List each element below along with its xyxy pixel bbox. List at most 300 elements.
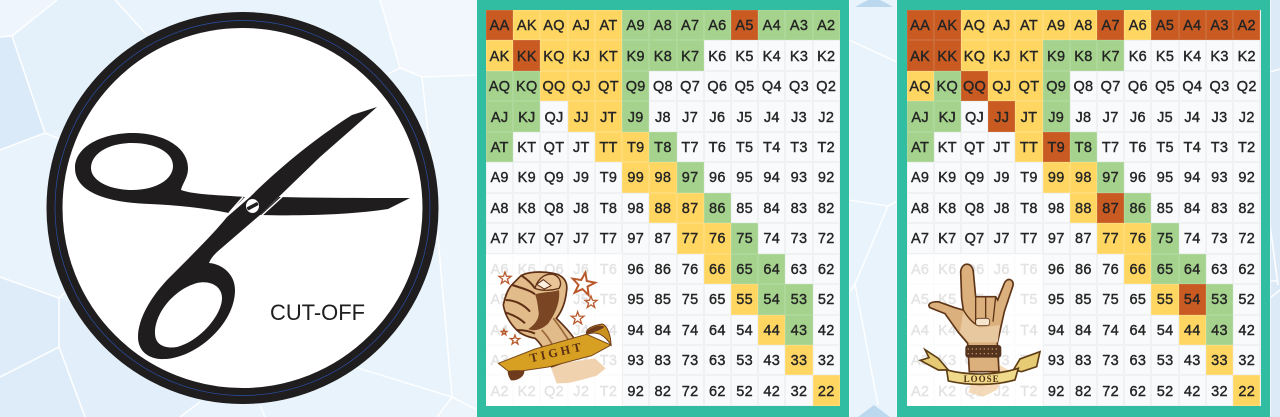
row J [907,101,1259,132]
row Q: QJ [992,79,1011,95]
row 5 [486,284,839,315]
row 6: 66 [1129,262,1146,278]
row 8 [487,193,839,223]
row 8: 82 [1238,201,1255,217]
row 3: Q3 [965,353,985,369]
row 3: 43 [1184,353,1201,369]
row 2 [486,375,840,406]
row A: A4 [763,18,781,34]
row 9: K9 [938,170,956,186]
row A [486,10,840,40]
row J: QJ [965,110,984,126]
row 3: 63 [709,353,726,369]
row Q: QT [1019,79,1039,95]
row 5: 55 [1157,292,1173,308]
row Q: Q9 [1046,79,1066,95]
row J: KJ [518,110,536,126]
row A: AJ [993,18,1011,34]
row J: J3 [791,110,807,126]
row 8: K8 [938,201,956,217]
row 4: K4 [518,323,536,339]
row 2: 22 [818,384,835,400]
row T: T9 [1047,140,1065,156]
row A: A6 [708,18,727,34]
row 7: 72 [1238,231,1255,247]
row J: J8 [655,110,671,126]
icon: scissors [75,107,410,359]
row 4: Q4 [965,323,985,339]
row 7: 77 [1102,231,1119,247]
row 4: 44 [1184,323,1201,339]
banner text: LOOSE [964,374,1000,384]
row 5: Q5 [544,292,564,308]
row 8: 83 [791,201,807,217]
row K: K6 [708,49,727,65]
row 5: 85 [655,292,671,308]
row J [486,101,839,132]
row 9: Q9 [544,170,564,186]
row 9: 93 [791,170,807,186]
row 7: K7 [518,231,536,247]
row J: KJ [939,110,956,126]
row 5: 53 [791,292,807,308]
row J: J3 [1212,110,1227,126]
hand shading [960,312,1000,342]
row 2: A2 [490,384,509,400]
row 6: 96 [1048,262,1065,278]
row T: T5 [1156,140,1174,156]
row 3: A3 [911,353,929,369]
row 2: 32 [791,384,807,400]
row 6: 64 [1184,262,1201,278]
row 6: 86 [1075,262,1092,278]
bracelet [965,345,1001,358]
row A: AJ [572,18,590,34]
hand [929,264,1013,372]
row 4: A4 [490,323,509,339]
row 8: 87 [1102,201,1119,217]
row 5: J5 [573,292,589,308]
row 2: J2 [573,384,589,400]
row A: A8 [654,18,672,34]
row 2: 52 [736,384,753,400]
row 4: 64 [709,323,726,339]
row Q: Q5 [1155,79,1175,95]
row K [486,40,839,71]
row 4: 43 [791,323,807,339]
row A: A2 [1238,18,1256,34]
row 5: 53 [1211,292,1228,308]
row 5: A5 [490,292,509,308]
row T: T6 [709,140,726,156]
row 3: 53 [1157,353,1173,369]
row K: KK [937,49,957,65]
row 5: T5 [1020,292,1038,308]
row 7: Q7 [544,231,564,247]
row A: A8 [1074,18,1093,34]
row 6 [486,254,839,284]
row 3: 33 [1211,353,1228,369]
row K: KK [517,49,537,65]
wrist splash [550,358,606,383]
row 5: J5 [994,292,1010,308]
row 8: 88 [1075,201,1092,217]
row T: JT [573,140,590,156]
row 2: Q2 [965,384,985,400]
row 7 [908,223,1259,254]
row 4: 54 [1157,323,1173,339]
row 4: 84 [1075,323,1092,339]
row 5: K5 [518,292,536,308]
row 8: T8 [1020,201,1038,217]
row 3 [486,345,839,375]
row 7: A7 [490,231,509,247]
row T: T5 [736,140,753,156]
row A: A9 [627,18,645,34]
row 2: 62 [709,384,726,400]
row T: T4 [763,140,781,156]
row 3: 93 [627,353,644,369]
fist shading [528,290,559,330]
row 9: 96 [709,170,726,186]
row 3: T3 [600,353,617,369]
row K: K6 [1129,49,1147,65]
row A: AQ [543,18,565,34]
row 4: Q4 [544,323,564,339]
row T: KT [938,140,957,156]
row 2: 42 [763,384,780,400]
row A: AK [937,18,957,34]
row T: T3 [1211,140,1228,156]
row 6: 63 [791,262,807,278]
row 4 [486,315,839,345]
row J: J5 [737,110,753,126]
row Q: AQ [909,79,931,95]
row 8: 86 [1129,201,1146,217]
badge circle [54,20,430,396]
banner tails [920,350,1040,372]
row 5: 55 [736,292,753,308]
row Q: Q3 [789,79,809,95]
row 4: 84 [655,323,671,339]
row 8: 85 [736,201,753,217]
row 7: 87 [655,231,671,247]
row 7: 76 [1129,231,1146,247]
row 8: Q8 [544,201,564,217]
row J: J6 [709,110,725,126]
row 8: 88 [655,201,671,217]
row 9: J9 [994,170,1010,186]
row 2: A2 [911,384,929,400]
row 9: 99 [1048,170,1065,186]
row J: J5 [1157,110,1173,126]
row 8: 82 [818,201,835,217]
row K: K9 [1047,49,1065,65]
row K: KQ [543,49,565,65]
splash [968,365,1008,397]
row 5: T5 [600,292,617,308]
row T: T8 [654,140,672,156]
row 8: J8 [994,201,1010,217]
row 6: 65 [1157,262,1173,278]
row K: K7 [681,49,699,65]
row 8: Q8 [965,201,985,217]
row 2: K2 [518,384,536,400]
row Q: AQ [489,79,510,95]
row 5: 52 [818,292,835,308]
row 9: 97 [1102,170,1119,186]
row 2: 92 [627,384,644,400]
row 7: 73 [1211,231,1228,247]
row 4: A4 [911,323,929,339]
row 6: 96 [627,262,644,278]
row J: J4 [764,110,780,126]
row 3: J3 [994,353,1010,369]
row 5: Q5 [965,292,985,308]
row T: T2 [1238,140,1256,156]
row 4: 44 [763,323,780,339]
row Q: KQ [937,79,958,95]
row 9 [487,162,839,193]
row K: K3 [790,49,808,65]
row K: KJ [993,49,1011,65]
row 8: J8 [573,201,589,217]
row J: J4 [1184,110,1200,126]
row T: T3 [790,140,808,156]
row 7: 75 [1157,231,1173,247]
row 6: 62 [1238,262,1255,278]
row 7: 74 [763,231,780,247]
row 5: 65 [709,292,726,308]
row 9: Q9 [965,170,985,186]
row K: K4 [1183,49,1201,65]
row T: AT [911,140,929,156]
row K: K8 [1074,49,1093,65]
row 3: T3 [1020,353,1038,369]
row T [486,132,839,162]
icon: rock-on hand with LOOSE banner [920,264,1040,397]
row 6: 62 [818,262,835,278]
row 4: 74 [682,323,698,339]
row 7: 97 [627,231,644,247]
row 8: 86 [709,201,726,217]
row J: J7 [1103,110,1119,126]
row 6: K6 [518,262,536,278]
row 9: T9 [600,170,617,186]
row 3: 93 [1048,353,1065,369]
row J: JT [1021,110,1037,126]
row A: A6 [1129,18,1147,34]
row J: J9 [1048,110,1064,126]
row 6: A6 [911,262,929,278]
row 6: 76 [682,262,698,278]
row 4: 54 [736,323,753,339]
row 6: 64 [763,262,780,278]
chart: tight range grid [486,10,840,406]
row Q: QT [598,79,619,95]
row T: T8 [1075,140,1092,156]
row 5: 75 [682,292,698,308]
row K: K5 [735,49,754,65]
row 6: Q6 [965,262,985,278]
row A: A9 [1047,18,1065,34]
row K: K9 [627,49,645,65]
row T: T7 [1102,140,1119,156]
row 5: A5 [911,292,929,308]
row A: AT [599,18,618,34]
row 3: 32 [818,353,835,369]
row J: J2 [1239,110,1255,126]
row T: T9 [627,140,644,156]
row J: J7 [682,110,698,126]
row 9: 95 [736,170,753,186]
row A: A7 [1101,18,1120,34]
row 6: 76 [1102,262,1119,278]
row 2: J2 [994,384,1010,400]
row 2 [907,375,1260,406]
row K: AK [490,49,510,65]
row T [907,132,1259,162]
row Q: Q2 [816,79,836,95]
row 3: 83 [655,353,671,369]
row 8: A8 [490,201,509,217]
row 3: Q3 [544,353,564,369]
row Q: QJ [572,79,591,95]
row Q: Q3 [1210,79,1229,95]
row 8: 87 [682,201,698,217]
row 8: 84 [763,201,780,217]
row 3: A3 [490,353,509,369]
row 7: J7 [994,231,1010,247]
row T: T2 [817,140,835,156]
row 8: A8 [911,201,929,217]
row 6: 63 [1211,262,1228,278]
icon: clenched fist with TIGHT banner [498,271,611,383]
row Q: Q7 [1101,79,1121,95]
row A: A3 [790,18,808,34]
row 9: A9 [911,170,929,186]
row 4: T4 [1020,323,1038,339]
row 4: 94 [1048,323,1065,339]
row Q: Q8 [1073,79,1093,95]
row 8: K8 [518,201,536,217]
row A: AT [1020,18,1038,34]
row 9: K9 [518,170,536,186]
row 2: 52 [1157,384,1173,400]
row 8: T8 [600,201,617,217]
row Q [486,71,839,101]
row T: TT [599,140,618,156]
row 7: J7 [573,231,589,247]
row 9: 98 [655,170,671,186]
row 3: 63 [1129,353,1146,369]
row 7: K7 [938,231,956,247]
row 7: T7 [600,231,617,247]
row 3: 33 [791,353,807,369]
banner [947,368,1018,384]
row 2: 82 [1075,384,1092,400]
row J: J6 [1130,110,1146,126]
row 7: 74 [1184,231,1201,247]
row Q: Q7 [680,79,700,95]
row 5: K5 [938,292,956,308]
row 7: A7 [911,231,929,247]
row 2: 32 [1211,384,1228,400]
row J: QJ [544,110,564,126]
row 8: 84 [1184,201,1201,217]
row J: AJ [491,110,508,126]
row 4: 43 [1211,323,1228,339]
row 4: 42 [1238,323,1255,339]
row A: A2 [817,18,835,34]
row 8 [908,193,1259,223]
row 6: 66 [709,262,726,278]
row Q [907,71,1259,101]
row 8: 83 [1211,201,1228,217]
row 3: 83 [1075,353,1092,369]
row K: KQ [964,49,985,65]
row 9: 94 [1184,170,1201,186]
row Q: Q4 [1182,79,1202,95]
row 2: 82 [655,384,671,400]
row Q: Q6 [1128,79,1148,95]
row K: AK [910,49,930,65]
row 2: 72 [1102,384,1119,400]
row 5: 52 [1238,292,1255,308]
teal frame: loose chart [897,0,1270,417]
row 4: 64 [1129,323,1146,339]
banner [498,334,611,373]
row 4: J4 [573,323,589,339]
row 3: 53 [736,353,753,369]
chart: loose range grid [906,10,1260,406]
row 9: J9 [573,170,589,186]
row 8: 98 [1048,201,1065,217]
row 9: 94 [763,170,780,186]
row A: A5 [1156,18,1174,34]
row Q: Q4 [762,79,782,95]
row K: K2 [817,49,835,65]
row A: A5 [735,18,754,34]
row 8: 85 [1157,201,1173,217]
row T: JT [993,140,1010,156]
row 9: A9 [490,170,509,186]
row 9: 98 [1075,170,1092,186]
row 5: 54 [1184,292,1201,308]
row J: J9 [628,110,644,126]
row 3 [907,345,1259,375]
row K: K8 [654,49,672,65]
row 4 [907,315,1259,345]
row A: A4 [1183,18,1201,34]
row 9: 99 [627,170,644,186]
row A: AQ [964,18,985,34]
row 6: Q6 [544,262,564,278]
row A: AA [490,18,510,34]
row 9: 93 [1211,170,1228,186]
row 3: 73 [682,353,698,369]
row K: K3 [1210,49,1229,65]
row 4: 42 [818,323,835,339]
row 6: T6 [1020,262,1038,278]
row 5: 95 [627,292,644,308]
label: CUT-OFF: CUT-OFF [270,300,365,325]
row 6: A6 [490,262,509,278]
row 7: T7 [1020,231,1038,247]
row Q: Q8 [653,79,673,95]
row K [907,40,1259,71]
row 3: J3 [573,353,589,369]
